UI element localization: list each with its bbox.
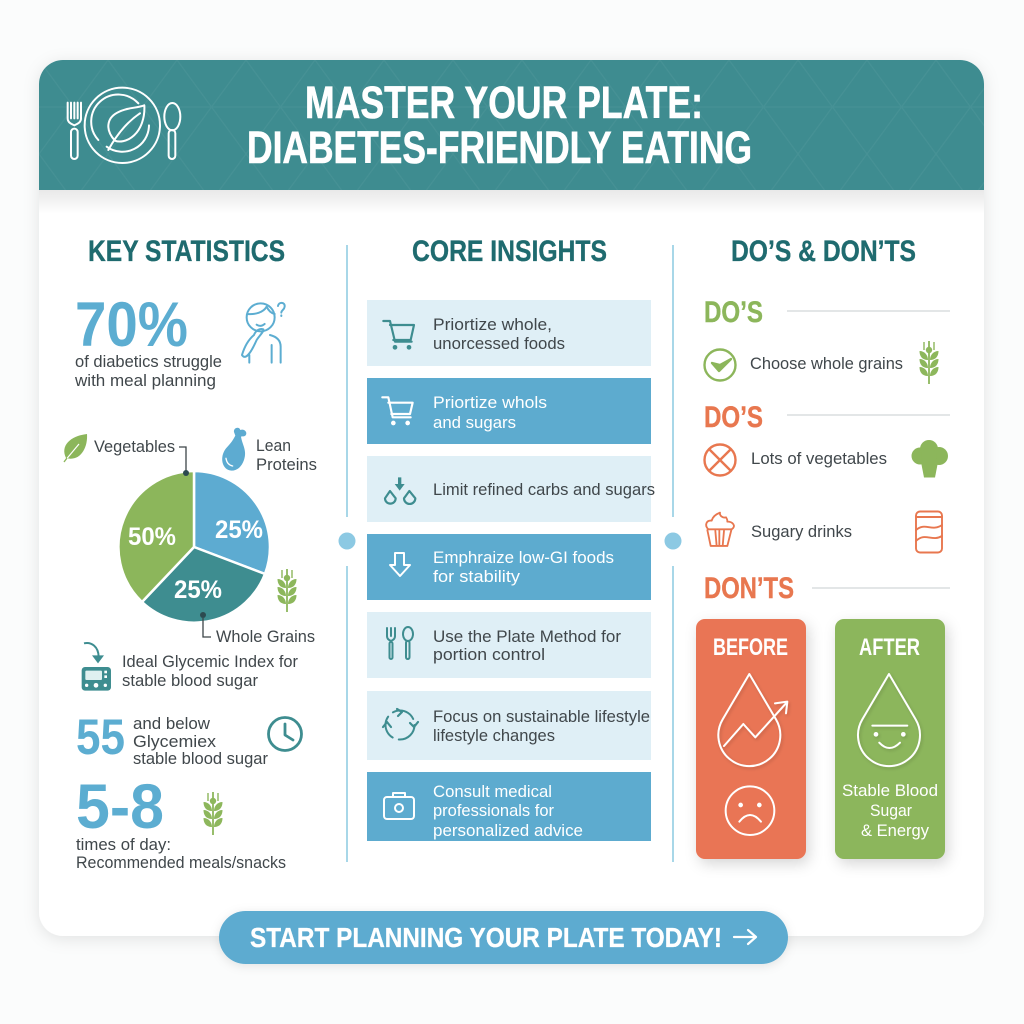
stat: 70 percent: with meal planning	[74, 372, 216, 390]
chart: plate pie chart: 50%	[128, 523, 176, 551]
panel: do's and don'ts	[696, 235, 950, 859]
insight card 6: Focus on sustainable lifestyle	[433, 708, 650, 726]
icon: soda can	[916, 512, 942, 552]
title: MASTER YOUR PLATE:	[305, 77, 703, 128]
stat: 55: stable blood sugar	[133, 750, 268, 768]
insight card 6	[367, 691, 651, 760]
icon: check	[704, 350, 736, 380]
icon: sugar drops	[385, 477, 415, 504]
insight card 4: Emphraize low-GI foods	[433, 549, 614, 567]
header banner	[39, 60, 984, 214]
stat: 55	[76, 709, 268, 768]
icon: wheat small	[204, 792, 222, 835]
panel: after card: AFTER	[859, 634, 920, 661]
panel: key statistics	[64, 235, 317, 872]
icon: cupcake	[706, 513, 734, 546]
subheading: do's red: DO’S	[704, 401, 763, 434]
icon: clock	[268, 718, 302, 750]
insight card 7: professionals for	[433, 802, 555, 820]
chart: plate pie chart	[118, 471, 270, 623]
item: choose whole grains: Choose whole grains	[750, 355, 903, 373]
call to action button: START PLANNING YOUR PLATE TODAY!	[250, 922, 722, 953]
text: glycemic index: stable blood sugar	[122, 672, 258, 690]
insight card 7: Consult medical	[433, 783, 552, 801]
insight card 7: personalized advice	[433, 822, 583, 840]
panel: after card	[835, 619, 945, 859]
chart: plate pie chart: 25%	[215, 516, 263, 544]
label: whole grains: Whole Grains	[216, 628, 315, 646]
item: sugary drinks: Sugary drinks	[751, 523, 852, 541]
insight card 1: Priortize whole,	[433, 316, 552, 334]
stat: 5-8 meals: 5-8	[76, 772, 164, 842]
icon: glucose meter	[82, 643, 111, 691]
text: stable blood sugar: Sugar	[870, 802, 912, 820]
panel: main card	[39, 60, 984, 936]
item: sugary drinks	[706, 512, 942, 552]
call to action button	[219, 911, 788, 964]
item: choose whole grains	[704, 341, 938, 384]
insight card 5: Use the Plate Method for	[433, 628, 622, 646]
insight card 4	[367, 534, 651, 600]
subheading: don'ts: DON’TS	[704, 572, 794, 605]
insight card 2: and sugars	[433, 414, 516, 432]
label: whole grains	[200, 612, 315, 646]
insight card 6: lifestyle changes	[433, 727, 555, 745]
insight card 2	[367, 378, 651, 444]
label: lean proteins: Proteins	[256, 456, 317, 474]
column dividers	[338, 245, 682, 862]
heading: key statistics: KEY STATISTICS	[88, 235, 285, 268]
title	[247, 77, 752, 173]
label: vegetables: Vegetables	[94, 438, 175, 456]
icon: fork and spoon	[387, 627, 413, 659]
icon: chicken leg	[222, 428, 246, 471]
subheading: do's green: DO’S	[704, 296, 763, 329]
icon: arrow	[734, 930, 756, 944]
icon: cart	[383, 321, 414, 350]
label: lean proteins	[256, 437, 317, 474]
stat: 5-8 meals	[76, 772, 286, 872]
text: glycemic index: Ideal Glycemic Index for	[122, 653, 298, 671]
text: stable blood sugar: & Energy	[861, 822, 930, 840]
insight card 3	[367, 456, 655, 522]
heading: core insights: CORE INSIGHTS	[412, 235, 607, 268]
stat: 55: 55	[76, 709, 125, 765]
stat: 70 percent: of diabetics struggle	[75, 353, 222, 371]
icon: cycle arrows	[383, 709, 418, 740]
icon: leaf	[64, 434, 87, 462]
stat: 55: Glycemiex	[133, 733, 217, 751]
label: lean proteins: Lean	[256, 437, 291, 455]
stat: 5-8 meals: times of day:	[76, 836, 171, 854]
panel: before card: BEFORE	[713, 634, 788, 661]
insight card 1: unorcessed foods	[433, 335, 565, 353]
title: DIABETES-FRIENDLY EATING	[247, 122, 752, 173]
insight card 5	[367, 612, 651, 678]
stat: 70 percent	[74, 290, 222, 390]
icon: medical case	[384, 793, 414, 819]
icon: plate with leaf and cutlery	[68, 88, 180, 163]
text: glycemic index	[122, 653, 298, 690]
icon: cart white	[382, 397, 413, 425]
icon: down arrow	[390, 553, 410, 576]
heading: do's and don'ts: DO’S & DON’TS	[731, 235, 916, 268]
icon: wheat	[920, 341, 938, 384]
chart: plate pie chart: 25%	[174, 576, 222, 604]
icon: sad face	[726, 786, 774, 835]
stat: 5-8 meals: Recommended meals/snacks	[76, 854, 286, 872]
icon: smiling drop	[858, 674, 920, 766]
insight card 7	[367, 772, 651, 841]
insight card 3: Limit refined carbs and sugars	[433, 481, 655, 499]
stat: 55: and below	[133, 715, 210, 733]
text: stable blood sugar: Stable Blood	[842, 782, 938, 800]
insight card 4: for stability	[433, 568, 521, 586]
panel: before card	[696, 619, 806, 859]
icon: cross	[704, 444, 736, 476]
icon: wheat	[278, 569, 296, 612]
insight card 2: Priortize whols	[433, 394, 547, 412]
text: stable blood sugar	[842, 782, 938, 840]
panel: core insights	[367, 235, 655, 841]
icon: drop with rising arrow	[718, 674, 787, 766]
item: lots of vegetables	[704, 440, 948, 478]
insight card 1	[367, 300, 651, 366]
insight card 5: portion control	[433, 646, 545, 664]
icon: thinking person	[242, 303, 285, 363]
item: lots of vegetables: Lots of vegetables	[751, 450, 887, 468]
label: vegetables	[94, 438, 189, 476]
stat: 70 percent: 70%	[75, 290, 188, 360]
icon: broccoli	[912, 440, 948, 478]
